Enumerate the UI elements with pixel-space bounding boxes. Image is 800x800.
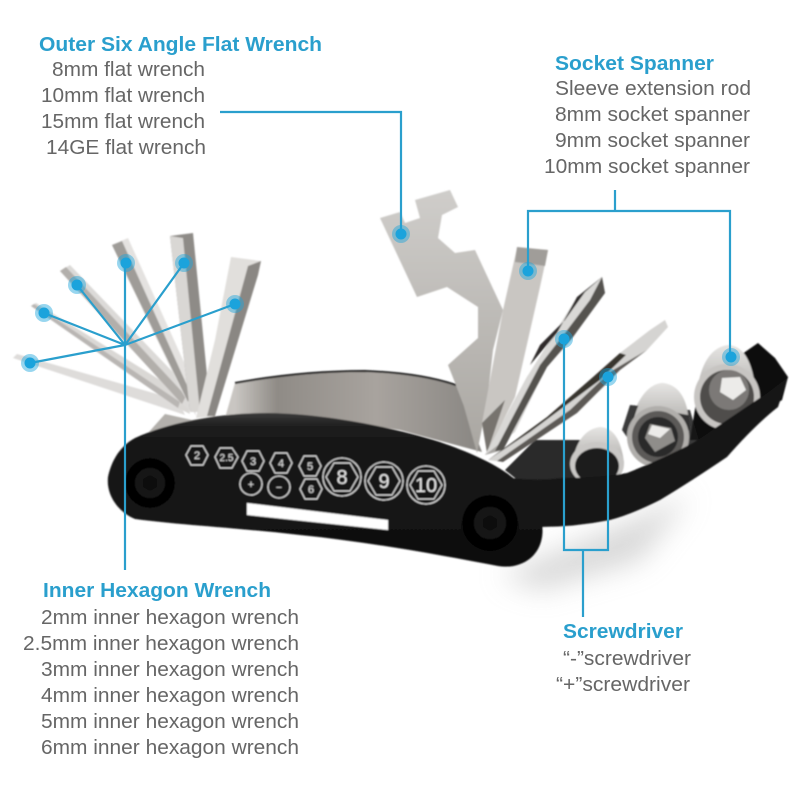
text block: inner hexagon wrench: 6mm inner hexagon wrench	[41, 736, 299, 759]
size markings: 2.5	[220, 453, 234, 464]
tool illustration	[13, 190, 788, 567]
text block: outer six angle flat wrench: 14GE flat wrench	[46, 136, 206, 159]
text block: outer six angle flat wrench: 8mm flat wrench	[52, 58, 205, 81]
flat wrench	[380, 190, 503, 453]
text block: outer six angle flat wrench	[39, 34, 322, 159]
size markings: 3	[250, 456, 256, 468]
hex key 4mm	[112, 238, 196, 416]
text block: socket spanner: 9mm socket spanner	[555, 129, 750, 152]
text block: socket spanner: Socket Spanner	[555, 53, 714, 75]
size markings	[186, 446, 445, 504]
size markings: −	[276, 482, 282, 494]
black handle	[108, 413, 543, 567]
text block: screwdriver: “-”screwdriver	[563, 647, 691, 670]
text block: outer six angle flat wrench: 15mm flat wrench	[41, 110, 205, 133]
text block: inner hexagon wrench: 5mm inner hexagon wrench	[41, 710, 299, 733]
text block: outer six angle flat wrench: 10mm flat wrench	[41, 84, 205, 107]
metal base under keys	[140, 414, 215, 442]
text block: socket spanner: Sleeve extension rod	[555, 77, 751, 100]
flat screwdriver	[488, 320, 668, 462]
size markings: 8	[336, 467, 348, 489]
connector lines	[30, 112, 730, 617]
size markings: +	[248, 479, 254, 491]
text block: screwdriver: Screwdriver	[563, 621, 683, 643]
text block: inner hexagon wrench: 2mm inner hexagon wrench	[41, 606, 299, 629]
marker dots	[21, 225, 740, 386]
hex key 2.5mm	[31, 303, 190, 414]
text block: socket spanner: 8mm socket spanner	[555, 103, 750, 126]
hex key 5mm	[170, 233, 208, 412]
right screw	[462, 495, 518, 551]
size markings: 4	[278, 458, 284, 470]
hex key 3mm	[60, 265, 192, 412]
size markings: 5	[307, 461, 313, 473]
text block: screwdriver: “+”screwdriver	[556, 673, 690, 696]
size markings: 10	[415, 475, 437, 497]
text block: inner hexagon wrench: 4mm inner hexagon wrench	[41, 684, 299, 707]
socket 3	[694, 345, 760, 430]
size markings: 2	[194, 450, 200, 462]
text block: inner hexagon wrench: 2.5mm inner hexagon wrench	[23, 632, 299, 655]
ground shadow	[500, 495, 690, 590]
socket 1	[570, 427, 624, 486]
slot	[247, 503, 388, 530]
size markings: 6	[308, 484, 314, 496]
socket spanner lever	[482, 247, 548, 453]
hex key 6mm	[196, 257, 261, 418]
phillips screwdriver	[485, 277, 605, 455]
text block: outer six angle flat wrench: Outer Six Angle Flat Wrench	[39, 34, 322, 56]
text block: inner hexagon wrench: 3mm inner hexagon wrench	[41, 658, 299, 681]
size markings: 9	[378, 471, 390, 493]
text block: screwdriver	[556, 621, 691, 696]
socket 2	[622, 383, 700, 470]
screw arm back tab	[690, 343, 788, 440]
hex key 2mm	[13, 354, 185, 415]
text block: inner hexagon wrench	[23, 580, 299, 759]
text block: inner hexagon wrench: Inner Hexagon Wrench	[43, 580, 271, 602]
text block: socket spanner: 10mm socket spanner	[544, 155, 750, 178]
right arm	[510, 377, 788, 527]
left screw	[125, 458, 175, 508]
text block: socket spanner	[544, 53, 751, 178]
curved steel back plate	[225, 371, 482, 452]
gap hardware	[505, 440, 600, 482]
